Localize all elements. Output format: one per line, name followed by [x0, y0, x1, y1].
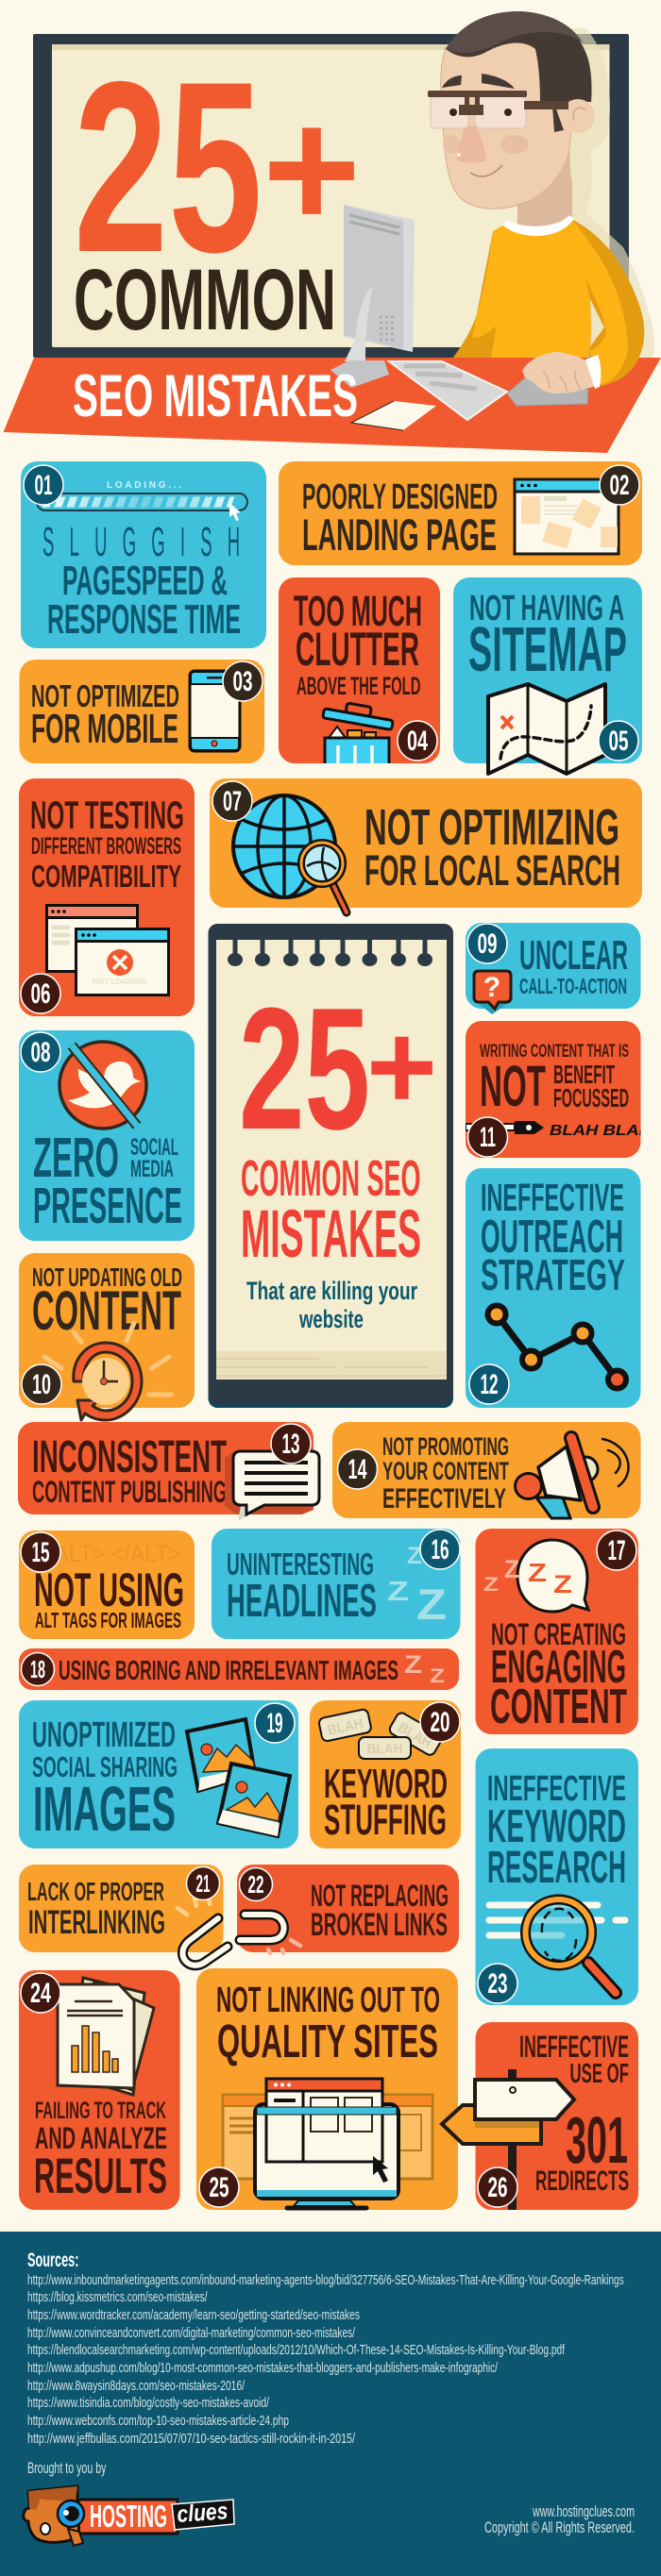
icon: sleeping speech bubble: Z	[528, 1558, 547, 1587]
text: sluggish: SLUGGISH	[42, 519, 240, 565]
icon: globe with magnifier	[233, 795, 347, 912]
text: different browsers: DIFFERENT BROWSERS	[31, 833, 181, 860]
icon: sleeping z letters: Z	[387, 1577, 409, 1607]
badge 24: 24	[30, 1978, 51, 2009]
title: 25+: 25	[74, 30, 263, 303]
icon: z letters: Z	[404, 1650, 422, 1679]
badge 21: 21	[196, 1869, 210, 1898]
text: your content: YOUR CONTENT	[382, 1457, 509, 1485]
badge 04: 04	[407, 726, 428, 757]
text: keyword: KEYWORD	[324, 1761, 448, 1807]
text: not replacing: NOT REPLACING	[311, 1879, 449, 1913]
text: lack of proper: LACK OF PROPER	[27, 1877, 164, 1906]
icon: broken link left inner	[182, 1918, 228, 1965]
badge 03: 03	[232, 666, 253, 697]
text: alt tags for images: ALT TAGS FOR IMAGES	[35, 1608, 181, 1632]
text: clutter: CLUTTER	[296, 623, 419, 676]
text: that are killing your website: website	[298, 1305, 364, 1333]
source list: https://blog.kissmetrics.com/seo-mistakes/	[27, 2289, 208, 2305]
badge 01	[24, 465, 63, 505]
text: brought to you by: Brought to you by	[27, 2459, 107, 2477]
text: not updating old: NOT UPDATING OLD	[32, 1263, 182, 1292]
title: COMMON: COMMON	[74, 252, 336, 348]
icon: browser window	[515, 479, 619, 554]
panel: 21 interlinking	[19, 1865, 228, 1965]
badge 19: 19	[266, 1708, 283, 1739]
badge 18: 18	[30, 1655, 45, 1683]
icon: question bubble: ?	[483, 972, 500, 1003]
icon: broken link left	[182, 1918, 228, 1965]
panel: 25 quality sites	[196, 1968, 458, 2210]
icon: blah tags: BLAH	[366, 1741, 402, 1757]
badge 16	[420, 1530, 460, 1569]
text: not promoting: NOT PROMOTING	[382, 1432, 509, 1461]
chart: line	[487, 1306, 626, 1389]
source list: http://www.8waysin8days.com/seo-mistakes-2016/	[27, 2378, 246, 2394]
icon: phone	[190, 671, 240, 751]
icon: map	[488, 684, 605, 774]
icon: spark lines	[268, 1940, 300, 1953]
note paper	[351, 401, 436, 430]
panel: 04 clutter	[279, 577, 440, 768]
desk banner	[4, 358, 661, 453]
text: not: NOT	[480, 1054, 546, 1118]
panel: 01 sluggish pagespeed	[21, 461, 266, 648]
badge 05	[599, 721, 638, 761]
badge 07	[212, 781, 252, 821]
badge 23	[478, 1964, 517, 2003]
source list: https://www.tisindia.com/blog/costly-seo-mistakes-avoid/	[27, 2395, 270, 2411]
cursor	[229, 503, 241, 521]
text: failing to track: FAILING TO TRACK	[35, 2098, 166, 2124]
badge 20	[420, 1702, 460, 1742]
computer monitor	[330, 205, 415, 388]
badge 03	[223, 661, 263, 701]
icon: sleeping speech bubble	[483, 1540, 588, 1612]
monitor frame	[33, 34, 629, 358]
text: response time: RESPONSE TIME	[47, 596, 241, 643]
panel: footer	[0, 2232, 661, 2576]
badge 25	[199, 2167, 239, 2207]
panel: 03 mobile	[19, 660, 264, 763]
badge 14	[338, 1449, 378, 1489]
badge 12: 12	[480, 1369, 499, 1400]
badge 13: 13	[281, 1429, 300, 1460]
text: interlinking: INTERLINKING	[28, 1904, 165, 1941]
panel: 08 social media	[19, 1030, 195, 1241]
badge 21	[187, 1866, 219, 1900]
spiral rings	[229, 940, 432, 966]
frame screen	[52, 44, 610, 347]
panel: 23 keyword research	[476, 1748, 638, 2005]
badge 18	[21, 1653, 55, 1685]
notepad page edges	[216, 1351, 447, 1380]
badge 19	[255, 1703, 295, 1743]
badge 10	[22, 1364, 61, 1404]
panel: 26 redirects	[442, 2022, 638, 2210]
icon: z letters: Z	[430, 1665, 445, 1687]
text: headlines: HEADLINES	[227, 1576, 377, 1627]
badge 15: 15	[32, 1537, 49, 1568]
icon: broken link right	[240, 1915, 283, 1940]
panel: 06 browsers	[19, 778, 195, 1016]
panel: 16 headlines	[212, 1529, 461, 1639]
text: that are killing your website	[246, 1277, 417, 1333]
panel: 15 alt tags	[19, 1531, 195, 1639]
logo: hosting clues: HOSTING	[90, 2499, 167, 2534]
text: quality sites: QUALITY SITES	[217, 2016, 438, 2067]
panel: 10 old content	[19, 1253, 195, 1420]
icon: speech bubble	[225, 1451, 319, 1521]
icon: report papers	[58, 1978, 154, 2095]
text: images: IMAGES	[33, 1774, 176, 1845]
text: 25+: 25	[239, 971, 370, 1165]
icon: crossed-out bird	[59, 1042, 146, 1129]
badge 20: 20	[431, 1707, 449, 1738]
panel: 13 publishing	[18, 1422, 319, 1521]
title: 25+: +	[263, 75, 361, 264]
badge 15	[21, 1532, 60, 1572]
icon: sleeping z letters: Z	[416, 1581, 447, 1629]
icon: photos	[187, 1719, 290, 1836]
icon: sleeping speech bubble: Z	[553, 1570, 572, 1598]
text: too much: TOO MUCH	[294, 587, 422, 635]
badge 25: 25	[210, 2172, 229, 2203]
panel: central notepad: COMMON SEO	[241, 1150, 421, 1207]
icon: computer monitor	[255, 2079, 398, 2208]
badge 08: 08	[30, 1037, 51, 1068]
badge 22	[240, 1868, 272, 1900]
panel: 22 broken links	[237, 1865, 459, 1953]
badge 06	[21, 974, 60, 1013]
badge 24	[21, 1973, 60, 2013]
icon: blah tags	[318, 1709, 444, 1759]
logo: hosting clues: clues	[176, 2498, 229, 2528]
icon: signpost	[442, 2069, 574, 2210]
icon: megaphone	[516, 1438, 629, 1518]
text: 25+: +	[366, 997, 437, 1135]
badge 26	[478, 2167, 517, 2207]
text: presence: PRESENCE	[33, 1178, 182, 1234]
text: results: RESULTS	[34, 2149, 167, 2204]
badge 17: 17	[608, 1535, 625, 1566]
text: uninteresting: UNINTERESTING	[227, 1547, 374, 1581]
badge 26: 26	[487, 2172, 508, 2203]
badge 11	[468, 1117, 508, 1157]
panel: central notepad	[208, 924, 453, 1408]
badge 11: 11	[480, 1122, 496, 1153]
badge 16: 16	[431, 1534, 449, 1565]
badge 17	[597, 1531, 636, 1570]
text: landing page: LANDING PAGE	[302, 510, 497, 560]
badge 02: 02	[610, 470, 629, 501]
text: zero: ZERO	[33, 1127, 119, 1189]
title: SEO MISTAKES: SEO MISTAKES	[73, 363, 358, 429]
text: for mobile: FOR MOBILE	[31, 706, 178, 752]
text: not linking out to: NOT LINKING OUT TO	[216, 1981, 440, 2020]
text: that are killing your website: That are killing your	[246, 1277, 417, 1305]
source list: http://www.webconfs.com/top-10-seo-mistakes-article-24.php	[27, 2413, 289, 2429]
icon: browser windows	[47, 906, 168, 995]
badge 05: 05	[608, 726, 629, 757]
man illustration	[428, 11, 654, 406]
text: effectively: EFFECTIVELY	[382, 1483, 506, 1514]
badge 13	[271, 1424, 311, 1464]
badge 04	[398, 721, 437, 761]
text: and analyze: AND ANALYZE	[35, 2121, 167, 2155]
text: social: SOCIAL	[130, 1134, 178, 1161]
badge 02	[600, 465, 639, 505]
text: social sharing: SOCIAL SHARING	[32, 1750, 178, 1783]
text: not using: NOT USING	[34, 1564, 184, 1616]
badge 01: 01	[34, 470, 53, 501]
icon: sleeping speech bubble: Z	[483, 1574, 499, 1596]
source list: http://www.jeffbullas.com/2015/07/07/10-seo-tactics-still-rockin-it-in-2015/	[27, 2431, 356, 2447]
icon: browser windows: NOT LOADING	[93, 978, 146, 986]
icon: clock	[44, 1323, 171, 1420]
text: not optimized: NOT OPTIMIZED	[31, 678, 179, 713]
panel: 12 outreach	[466, 1168, 640, 1408]
faint alt code text: <ALT> </ALT>	[42, 1541, 181, 1567]
text: unoptimized: UNOPTIMIZED	[32, 1715, 176, 1755]
panel: 02 landing page	[279, 461, 642, 565]
badge 09	[467, 924, 507, 963]
text: broken links: BROKEN LINKS	[311, 1907, 448, 1943]
badge 22: 22	[247, 1870, 264, 1899]
text: using boring and irrelevant images: USING BORING AND IRRELEVANT IMAGES	[59, 1656, 398, 1686]
icon: pen with blah text: BLAH BLAH	[550, 1123, 653, 1139]
badge 08	[21, 1032, 60, 1072]
panel: 14 promotion	[332, 1422, 640, 1518]
panel: 17 engaging content	[476, 1529, 638, 1734]
badge 09: 09	[478, 928, 497, 960]
panel: 19 social images	[19, 1700, 298, 1848]
panel: 07 local search	[210, 778, 642, 912]
text: media: MEDIA	[130, 1156, 174, 1182]
icon: blah tags: BLAH	[396, 1719, 434, 1751]
text: pagespeed: PAGESPEED &	[62, 558, 228, 604]
text: content publishing: CONTENT PUBLISHING	[32, 1475, 227, 1509]
icon: z letters	[404, 1650, 445, 1687]
text: stuffing: STUFFING	[324, 1796, 447, 1844]
icon: trash can	[321, 702, 395, 763]
loading label: LOADING...	[107, 480, 181, 491]
text: compatibility: COMPATIBILITY	[31, 859, 181, 894]
keyboard	[389, 361, 507, 420]
panel: 18 boring images	[19, 1648, 459, 1690]
badge 07: 07	[223, 786, 242, 817]
text: mistakes: MISTAKES	[241, 1197, 421, 1272]
badge 14: 14	[347, 1454, 367, 1485]
icon: broken link right inner	[240, 1915, 283, 1940]
panel: 11 benefit focused content	[466, 1021, 653, 1158]
icon: sleeping speech bubble: Z	[504, 1555, 519, 1583]
icon: sleeping z letters: Z	[407, 1543, 422, 1569]
heading: sources: Sources:	[27, 2250, 79, 2271]
icon: magnifier over lines	[489, 1899, 625, 1993]
source list: http://www.convinceandconvert.com/digital-marketing/common-seo-mistakes/	[27, 2325, 356, 2341]
icon: blah tags: BLAH	[326, 1715, 364, 1739]
panel: 24 tracking results	[19, 1970, 180, 2210]
icon: question bubble	[474, 971, 511, 1014]
source list: https://www.wordtracker.com/academy/learn-seo/getting-started/seo-mistakes	[27, 2307, 360, 2323]
badge 06: 06	[30, 979, 51, 1010]
icon: back window	[223, 2095, 432, 2179]
text: not testing: NOT TESTING	[30, 793, 184, 837]
panel: 05 sitemap	[453, 577, 642, 774]
loading bar	[37, 493, 247, 510]
text: content: CONTENT	[32, 1280, 181, 1342]
panel: 09 call to action	[466, 923, 640, 1014]
badge 12	[469, 1364, 509, 1404]
panel: 20 keyword stuffing	[310, 1700, 461, 1848]
icon: sleeping z letters	[387, 1543, 447, 1629]
logo: hosting clues	[24, 2486, 234, 2546]
header illustration	[4, 11, 661, 453]
text: above the fold: ABOVE THE FOLD	[297, 672, 421, 700]
badge 23: 23	[487, 1968, 508, 1999]
text: poorly designed: POORLY DESIGNED	[302, 477, 498, 517]
icon: spark lines	[178, 1899, 210, 1915]
source list	[27, 2272, 624, 2447]
icon: pen with blah text	[466, 1121, 640, 1135]
badge 10: 10	[32, 1369, 51, 1400]
text: inconsistent: INCONSISTENT	[32, 1432, 227, 1482]
